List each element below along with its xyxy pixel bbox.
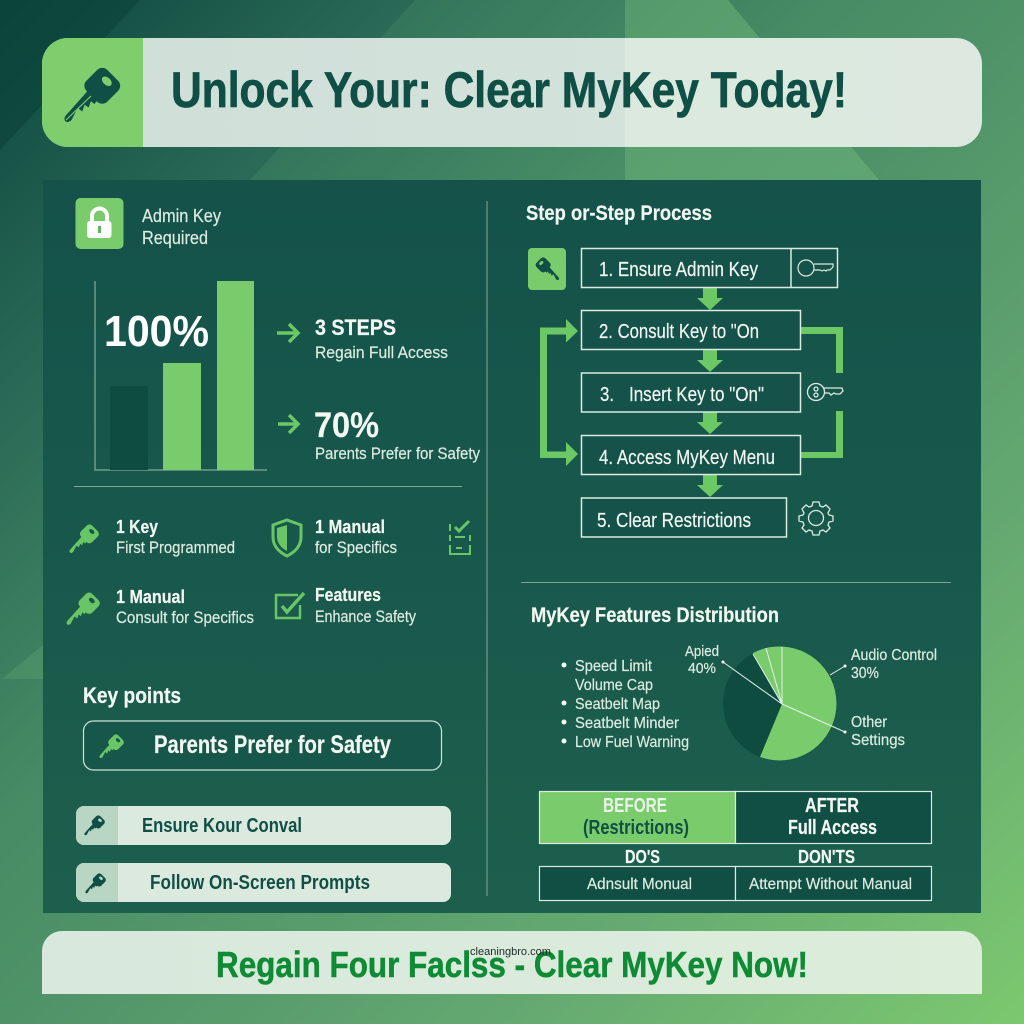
bar chart <box>95 281 267 470</box>
icon: lock <box>87 209 112 238</box>
pie chart: Audio Control <box>851 647 937 664</box>
feature list <box>562 658 689 751</box>
step 3 <box>582 373 800 412</box>
stat: 70%: 70% <box>314 406 379 445</box>
pie chart: 30% <box>851 665 879 682</box>
loop arrows <box>540 319 843 466</box>
step 1 <box>582 248 838 288</box>
panel: step process <box>526 202 843 537</box>
do and don't table: Attempt Without Manual <box>749 876 912 893</box>
step 2: 2. Consult Key to "On <box>599 321 759 343</box>
feature list: Volume Cap <box>575 677 653 694</box>
pill: follow <box>76 863 451 902</box>
icon: banner key <box>64 65 123 122</box>
icon: checklist <box>450 521 470 554</box>
fact: consult manual: 1 Manual <box>116 587 185 607</box>
admin key callout: Required <box>142 228 208 248</box>
fact: features <box>276 585 416 626</box>
pie chart: 40% <box>688 660 716 677</box>
key point box: Parents Prefer for Safety <box>154 731 391 759</box>
key points heading: Key points <box>83 683 181 708</box>
heading: MyKey Features Distribution <box>531 604 779 627</box>
bar chart: 100% <box>104 307 209 356</box>
panel: features distribution <box>531 604 937 900</box>
feature list: Seatbelt Map <box>575 696 660 713</box>
pill: follow: Follow On-Screen Prompts <box>150 872 370 894</box>
watermark: cleaningbro.com <box>470 946 551 958</box>
fact: consult manual <box>67 587 254 627</box>
do and don't table: DO'S <box>625 847 660 867</box>
before after table: (Restrictions) <box>583 817 689 839</box>
fact: 1 key: First Programmed <box>116 538 235 557</box>
step 5 <box>582 498 786 537</box>
admin key callout <box>76 198 221 249</box>
arrow <box>277 324 298 342</box>
fact: consult manual: Consult for Specifics <box>116 608 254 627</box>
step 4 <box>582 436 800 474</box>
stat: 70% <box>278 406 480 463</box>
step 5: 5. Clear Restrictions <box>597 510 751 532</box>
do and don't table: Adnsult Monual <box>587 876 692 893</box>
pill: ensure: Ensure Kour Conval <box>142 815 302 837</box>
heading: Step or-Step Process <box>526 202 712 225</box>
fact: 1 key <box>70 517 235 557</box>
step 2 <box>582 310 800 350</box>
icon: key tile <box>528 248 566 290</box>
feature list: Speed Limit <box>575 658 652 675</box>
pie chart: Settings <box>851 732 905 749</box>
title banner <box>42 38 982 147</box>
before after table: Full Access <box>788 817 877 839</box>
icon: shield <box>273 520 301 556</box>
title: Unlock Your: Clear MyKey Today! <box>171 62 847 118</box>
footer banner <box>42 931 982 994</box>
stat: 3 steps: Regain Full Access <box>315 343 448 362</box>
flow arrows <box>697 288 723 497</box>
pie chart: Other <box>851 714 888 731</box>
stat: 70%: Parents Prefer for Safety <box>315 444 480 463</box>
feature list: Seatbelt Minder <box>575 715 680 732</box>
step 4: 4. Access MyKey Menu <box>599 447 775 469</box>
footer text: Regain Four Faclss - Clear MyKey Now! <box>216 944 808 985</box>
key point box <box>84 721 442 770</box>
pie chart <box>685 643 937 760</box>
icon: check box <box>276 593 304 618</box>
icon: key outline middle <box>808 384 843 400</box>
stat: 3 steps <box>277 315 448 362</box>
pie chart: Apied <box>685 643 719 660</box>
do and don't table: DON'TS <box>798 847 855 867</box>
main panel <box>43 180 981 913</box>
do and don't table <box>540 847 932 900</box>
panel: left column <box>67 198 480 902</box>
arrow <box>278 415 298 433</box>
icon: gear <box>799 502 833 535</box>
stat: 3 steps: 3 STEPS <box>315 315 396 340</box>
fact: features: Features <box>315 585 381 605</box>
feature list: Low Fuel Warning <box>575 734 689 751</box>
step 3: 3. <box>600 384 614 406</box>
step 3: Insert Key to "On" <box>629 384 764 406</box>
before after table <box>540 792 932 844</box>
step 1: 1. Ensure Admin Key <box>599 259 758 281</box>
admin key callout: Admin Key <box>142 206 221 226</box>
fact: features: Enhance Safety <box>315 607 416 626</box>
fact: 1 manual: 1 Manual <box>315 517 385 537</box>
before after table: AFTER <box>805 795 859 817</box>
pill: ensure <box>76 806 451 845</box>
icon: key outline <box>798 260 833 276</box>
fact: 1 manual <box>273 517 397 557</box>
fact: 1 key: 1 Key <box>116 517 158 537</box>
fact: 1 manual: for Specifics <box>315 538 397 557</box>
before after table: BEFORE <box>603 795 667 817</box>
